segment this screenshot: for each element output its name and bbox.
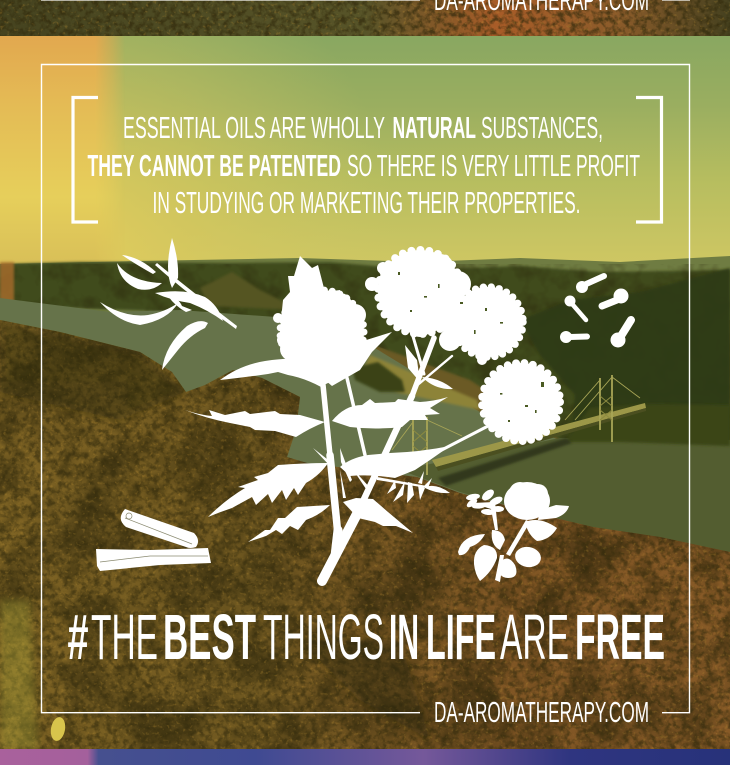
leaf: upper left (220, 359, 323, 388)
umbel: left flower head with top leaf (273, 256, 392, 386)
icon: main flowering plant (185, 250, 560, 581)
umbel: large top flower head (365, 250, 523, 365)
suspension bridge (392, 375, 646, 475)
quote text (88, 111, 640, 220)
left bracket (73, 98, 98, 222)
dark midground hills (0, 262, 730, 440)
yellow glow in lower left sky (103, 36, 310, 262)
leaf: lower right (340, 446, 450, 478)
tan island (360, 355, 480, 410)
hashtag headline: THE (91, 601, 158, 673)
icon: cloves (560, 276, 631, 348)
water (0, 298, 556, 505)
sky gradient (100, 36, 730, 262)
left yellow band (0, 36, 125, 266)
quote text: SUBSTANCES, (481, 111, 603, 145)
leaf: middle right (332, 397, 448, 428)
icon: cinnamon sticks (96, 509, 211, 571)
icon: rose flower with leaves (458, 482, 569, 582)
foreground forest (0, 300, 730, 750)
bottom strip: next panel (0, 749, 730, 765)
quote text: ESSENTIAL OILS ARE WHOLLY (123, 111, 385, 145)
hashtag headline: ARE (500, 601, 569, 673)
hashtag headline (68, 601, 665, 673)
quote text: THEY CANNOT BE PATENTED (88, 149, 341, 183)
quote text: NATURAL (392, 111, 476, 145)
leaf: low right (343, 498, 413, 533)
bridge shadow on water (438, 438, 572, 486)
icon: eucalyptus sprig (100, 238, 237, 370)
leaf: small pinnate sprig (377, 471, 450, 503)
hashtag headline: # (68, 601, 88, 673)
right bracket (636, 98, 662, 222)
small spikes at stem (313, 448, 332, 466)
hashtag headline: IN (389, 601, 419, 673)
white frame (42, 64, 690, 713)
leaf: low left (248, 505, 330, 542)
hashtag headline: THINGS (263, 601, 384, 673)
right dark hill (520, 268, 730, 445)
plant stems (322, 333, 490, 581)
hashtag headline: BEST (163, 601, 256, 673)
flower specks (398, 272, 503, 334)
small leaf on branch (422, 377, 453, 389)
hashtag headline: LIFE (426, 601, 496, 673)
leaf: middle left (185, 410, 325, 437)
top strip: previous panel photo (0, 0, 730, 36)
umbel: lower right flower head (482, 363, 560, 441)
leaf: lower left (208, 463, 328, 517)
distant ridges (0, 256, 730, 312)
far shore right (565, 404, 730, 446)
